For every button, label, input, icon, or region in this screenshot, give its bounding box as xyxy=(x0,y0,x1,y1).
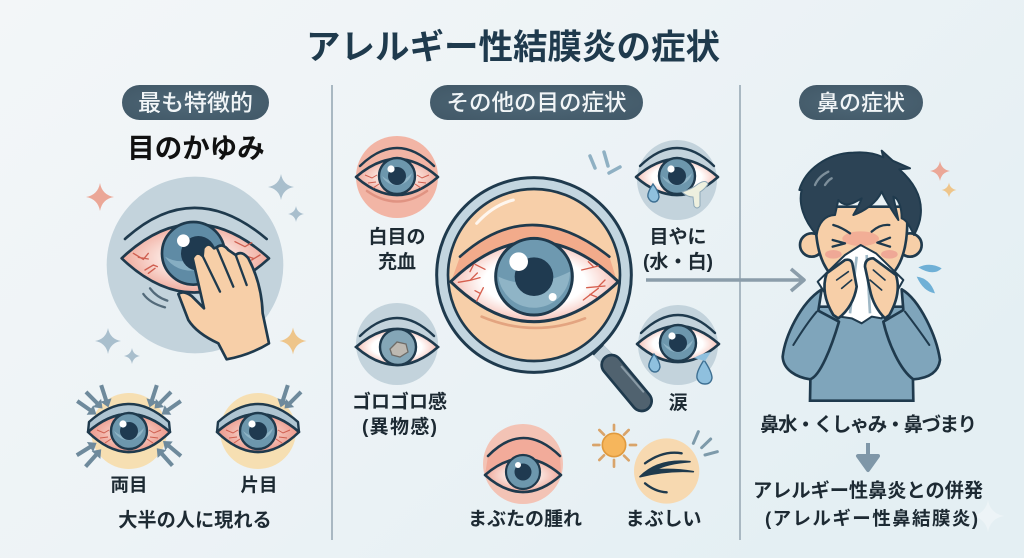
label: 目やに（水・白） xyxy=(643,226,713,273)
icon: watery eye xyxy=(637,305,719,385)
label: 涙: 涙 xyxy=(668,392,688,414)
heading pill: 鼻の症状 xyxy=(799,85,923,120)
heading pill: 最も特徴的 xyxy=(122,85,269,120)
arrow: down xyxy=(858,443,878,470)
icon: sun xyxy=(593,425,636,467)
icon: photophobia eye xyxy=(634,432,717,504)
sparkles xyxy=(930,161,956,198)
label: ゴロゴロ感（異物感）: (異物感) xyxy=(362,415,437,438)
icon: boy sneezing into tissue xyxy=(783,151,942,401)
label: 白目の充血 xyxy=(368,226,426,273)
heading: 目のかゆみ: 目のかゆみ xyxy=(127,132,265,164)
icon: bloodshot eye xyxy=(356,136,438,218)
title: アレルギー性結膜炎の症状 xyxy=(306,29,720,67)
icon: discharge eye xyxy=(636,140,718,220)
label: 片目: 片目 xyxy=(240,474,278,496)
icon: both eyes xyxy=(74,383,185,471)
icon: emphasis ticks xyxy=(590,152,620,173)
label: 両目: 両目 xyxy=(110,474,148,496)
label: 目やに（水・白）: 目やに xyxy=(649,226,707,248)
sparkles xyxy=(86,174,306,364)
icon: itchy eye rubbed by hand xyxy=(107,177,283,359)
text: 大半の人に現れる: 大半の人に現れる xyxy=(118,510,272,532)
text: アレルギー性鼻炎との併発: アレルギー性鼻炎との併発 xyxy=(753,480,983,502)
label: 白目の充血: 白目の xyxy=(368,226,426,248)
panel: nose symptoms xyxy=(753,85,983,529)
icon: one eye xyxy=(217,383,305,469)
heading pill: その他の目の症状 xyxy=(430,85,643,120)
label: ゴロゴロ感（異物感）: ゴロゴロ感 xyxy=(352,390,447,413)
heading pill: 鼻の症状: 鼻の症状 xyxy=(817,90,905,116)
text: 鼻水・くしゃみ・鼻づまり: 鼻水・くしゃみ・鼻づまり xyxy=(760,414,977,436)
icon: swollen eyelid xyxy=(483,424,563,504)
label: ゴロゴロ感（異物感） xyxy=(352,390,447,438)
icon: magnifier with eye xyxy=(437,178,643,401)
heading pill: 最も特徴的: 最も特徴的 xyxy=(138,90,253,116)
panel: most characteristic symptom xyxy=(74,85,306,532)
arrow: eye symptoms to nose symptoms xyxy=(646,269,804,291)
label: 白目の充血: 充血 xyxy=(378,251,416,273)
icon: foreign body eye xyxy=(356,303,438,385)
text: （アレルギー性鼻結膜炎）: (アレルギー性鼻結膜炎) xyxy=(765,508,978,529)
heading pill: その他の目の症状: その他の目の症状 xyxy=(446,90,627,116)
label: まぶたの腫れ: まぶたの腫れ xyxy=(468,508,582,530)
label: 目やに（水・白）: (水・白) xyxy=(643,251,713,273)
panel: other eye symptoms xyxy=(352,85,719,530)
label: まぶしい: まぶしい xyxy=(625,509,702,530)
